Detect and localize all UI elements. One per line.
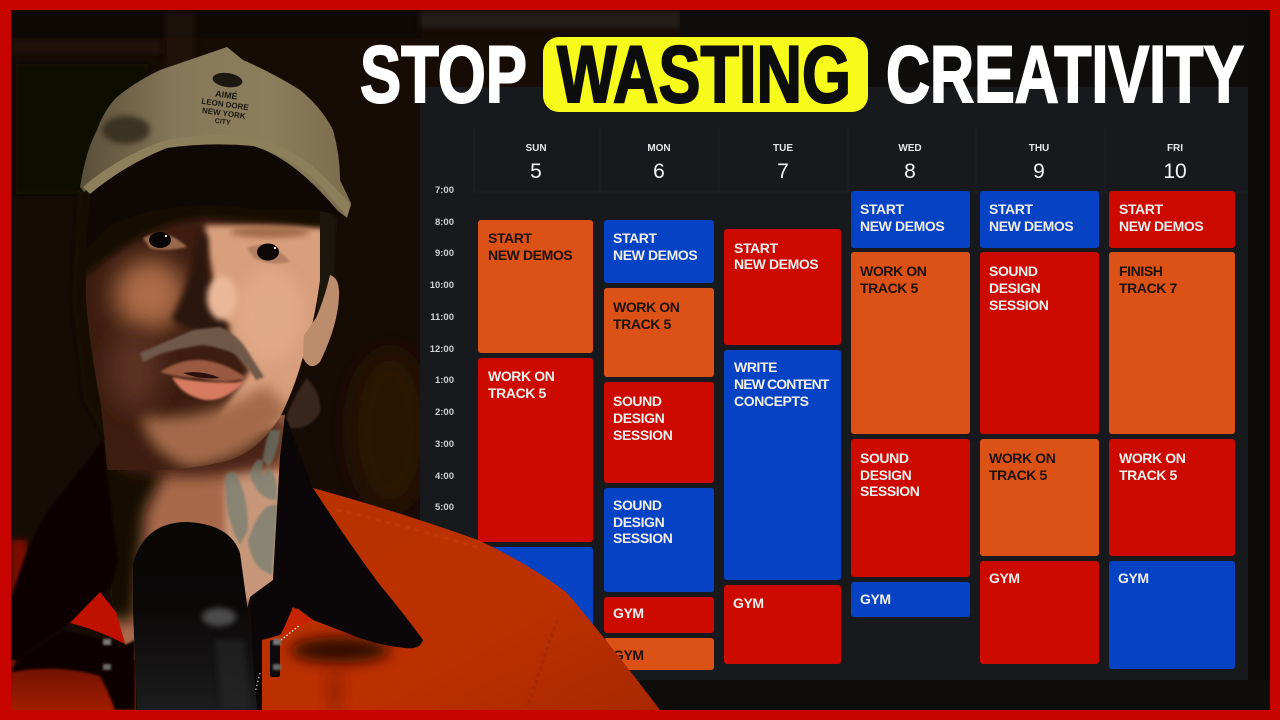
column: Thursday events: GYM [989, 570, 1020, 586]
time axis labels: 8:00 [435, 217, 454, 228]
day headers: 6 [653, 160, 665, 183]
column: Sunday events [478, 220, 593, 667]
column: Monday events: DESIGN [613, 514, 665, 530]
time axis labels: 2:00 [435, 407, 454, 418]
microphone [103, 522, 281, 710]
cap logo text: CITY [214, 118, 231, 127]
time axis labels: 5:00 [435, 502, 454, 513]
time axis labels: 1:00 [435, 375, 454, 386]
column: Wednesday events [851, 191, 970, 617]
left collar [11, 440, 118, 660]
day headers: 8 [904, 160, 916, 183]
column: Friday events [1109, 191, 1235, 669]
column: Wednesday events: SOUND [860, 450, 909, 466]
right collar [250, 415, 423, 708]
column: Friday events: WORK ON [1119, 450, 1186, 466]
brim shadow [86, 200, 320, 278]
cap logo text: NEW YORK [201, 106, 246, 121]
column: Wednesday events: SESSION [860, 483, 920, 499]
column: Monday events [604, 220, 714, 670]
column: Thursday events: NEW DEMOS [989, 218, 1073, 234]
column: Tuesday events: CONCEPTS [734, 393, 809, 409]
column: Thursday events [980, 191, 1099, 664]
column: Thursday events: WORK ON [989, 450, 1056, 466]
time axis labels: 10:00 [430, 280, 454, 291]
column: Friday events: GYM [1118, 570, 1149, 586]
column: Monday events: DESIGN [613, 410, 665, 426]
column: Thursday events: TRACK 5 [989, 467, 1047, 483]
column: Wednesday events: WORK ON [860, 263, 927, 279]
time axis labels: 4:00 [435, 471, 454, 482]
time axis labels: 9:00 [435, 248, 454, 259]
time axis labels: 3:00 [435, 439, 454, 450]
column: Monday events: SESSION [613, 427, 673, 443]
day headers: 9 [1033, 160, 1045, 183]
column: Tuesday events: NEW CONTENT [734, 376, 830, 392]
tattoo [225, 430, 280, 575]
jacket left side [11, 660, 136, 710]
time axis labels: 12:00 [430, 344, 454, 355]
day headers: 7 [777, 160, 789, 183]
ear [303, 275, 339, 366]
column: Tuesday events: WRITE [734, 359, 777, 375]
neck with tattoo [106, 415, 285, 660]
face [80, 195, 339, 475]
column: Tuesday events: GYM [733, 595, 764, 611]
cap logo text [199, 70, 254, 129]
moustache and mouth [140, 327, 264, 400]
time axis labels: 7:00 [435, 185, 454, 196]
nose shadow [172, 232, 232, 330]
hair around face [72, 190, 337, 440]
column: Friday events: TRACK 5 [1119, 467, 1177, 483]
column: Tuesday events: START [734, 240, 778, 256]
day headers: THU [1029, 143, 1049, 154]
eyes [143, 232, 290, 263]
column: Monday events: GYM [613, 605, 644, 621]
column: Monday events: GYM [613, 647, 644, 663]
cap [80, 47, 351, 250]
column: Monday events: SESSION [613, 530, 673, 546]
column: Tuesday events: NEW DEMOS [734, 256, 818, 272]
day headers: WED [898, 143, 922, 154]
column: Monday events: NEW DEMOS [613, 247, 697, 263]
column: Sunday events: TRACK 5 [488, 385, 546, 401]
column: Sunday events: NEW DEMOS [488, 247, 572, 263]
column: Monday events: START [613, 230, 657, 246]
day headers: MON [647, 143, 671, 154]
left cheek light [114, 259, 186, 331]
column: Sunday events: START [488, 230, 532, 246]
column: Wednesday events: NEW DEMOS [860, 218, 944, 234]
column: Monday events: WORK ON [613, 299, 680, 315]
illustration: presenter with cap and microphone [11, 47, 660, 714]
time axis labels [430, 185, 454, 513]
panel: calendar [420, 87, 1248, 680]
highlighted word: WASTING: WASTING [557, 30, 851, 120]
day headers: 10 [1163, 160, 1187, 183]
column: Friday events: FINISH [1119, 263, 1163, 279]
title word: STOP: STOP [360, 30, 527, 120]
day headers [525, 143, 1187, 183]
day headers: FRI [1167, 143, 1183, 154]
cap logo text: LEON DORE [201, 97, 250, 112]
time axis labels: 11:00 [430, 312, 454, 323]
column: Wednesday events: GYM [860, 591, 891, 607]
column: Friday events: NEW DEMOS [1119, 218, 1203, 234]
column: Monday events: SOUND [613, 393, 662, 409]
column: Thursday events: START [989, 201, 1033, 217]
column: Friday events: START [1119, 201, 1163, 217]
cap logo text: AIMÉ [215, 89, 238, 102]
day headers: 5 [530, 160, 542, 183]
column: Sunday events: WORK ON [488, 368, 555, 384]
jacket right shoulder [262, 488, 660, 710]
column: Thursday events: DESIGN [989, 280, 1041, 296]
day headers: SUN [525, 143, 547, 154]
column: Tuesday events [724, 229, 841, 664]
column: Monday events: SOUND [613, 497, 662, 513]
chin light [140, 385, 290, 468]
title [360, 30, 1244, 120]
column: Monday events: TRACK 5 [613, 316, 671, 332]
column: Thursday events: SESSION [989, 297, 1049, 313]
column: Friday events: TRACK 7 [1119, 280, 1177, 296]
lit right side [200, 225, 325, 445]
column: Wednesday events: DESIGN [860, 467, 912, 483]
day headers: TUE [773, 143, 793, 154]
jacket [11, 415, 660, 714]
column: Wednesday events: TRACK 5 [860, 280, 918, 296]
column: Thursday events: SOUND [989, 263, 1038, 279]
column: Wednesday events: START [860, 201, 904, 217]
